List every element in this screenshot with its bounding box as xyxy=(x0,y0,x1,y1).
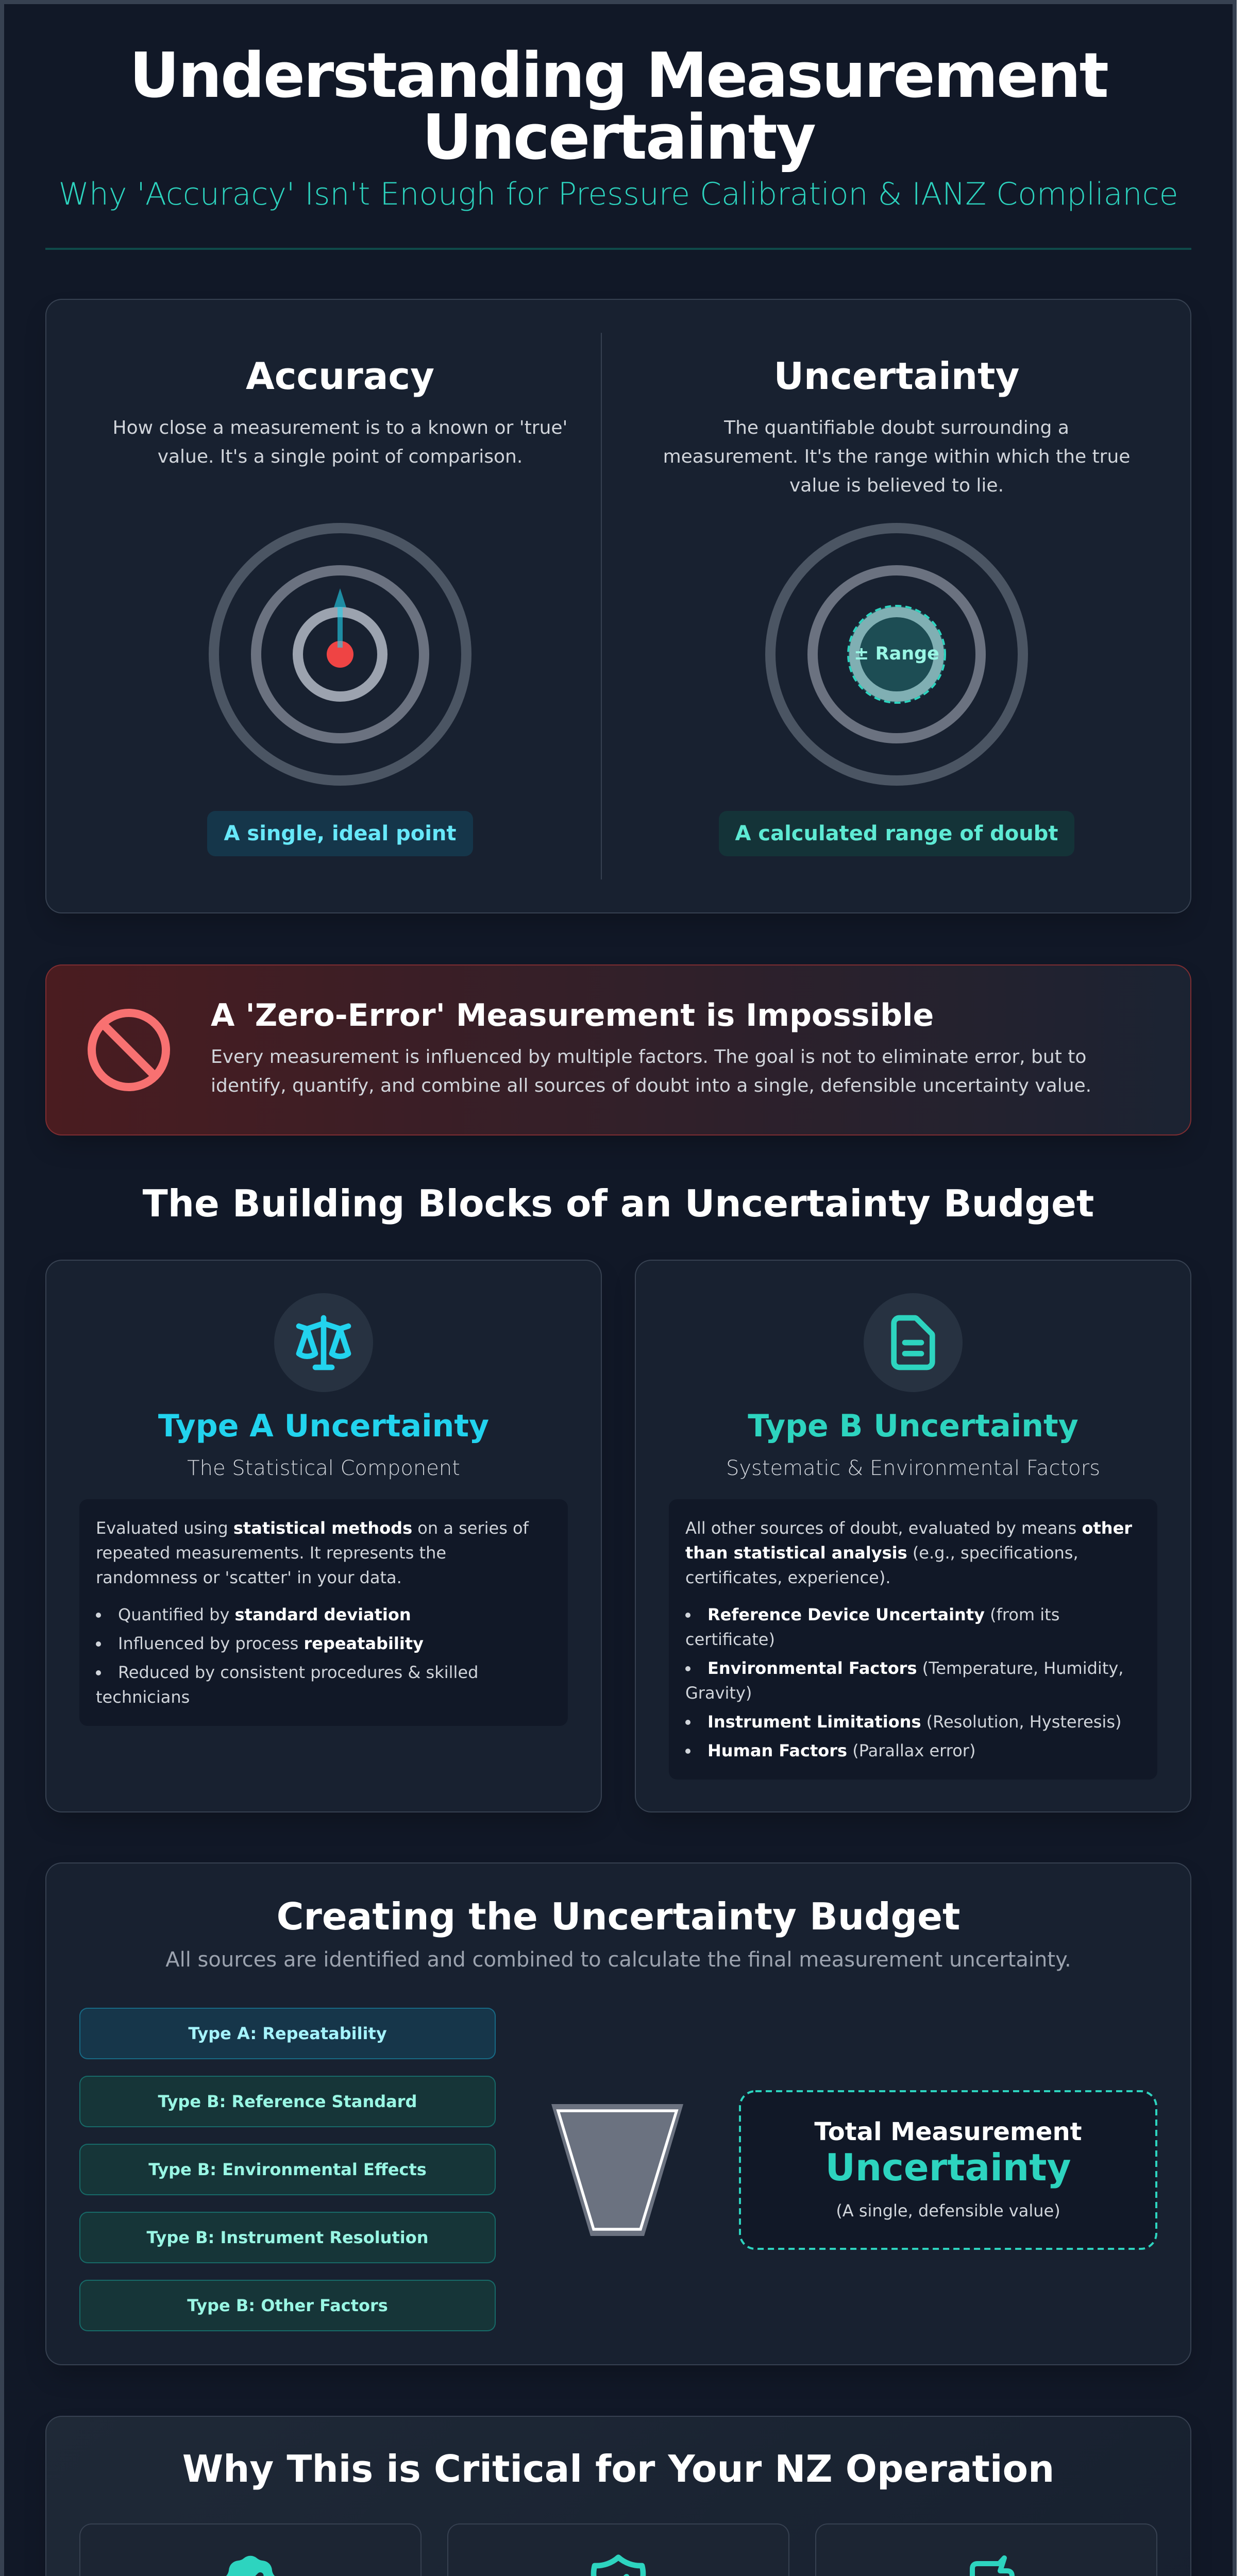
source: environmental effects xyxy=(79,2144,496,2195)
source: environmental effects: Type B: Environmental Effects xyxy=(148,2160,427,2179)
icon: scales xyxy=(274,1293,373,1392)
text: zero-error body: identify, quantify, and combine all sources of doubt into a single, defensible uncertainty value. xyxy=(211,1075,1091,1096)
text: accuracy definition xyxy=(113,417,567,467)
icon: target with single point xyxy=(209,523,471,786)
panel: uncertainty column xyxy=(663,354,1130,856)
text block: type B details: Reference Device Uncertainty (from its certificate) xyxy=(685,1605,1059,1649)
heading: zero-error: A 'Zero-Error' Measurement is Impossible xyxy=(211,997,934,1033)
callout: total measurement uncertainty xyxy=(739,2090,1157,2250)
panel: accuracy column xyxy=(113,354,567,856)
panel: type B xyxy=(635,1260,1191,1812)
icon: target with range xyxy=(765,523,1028,786)
text block: type B details: Environmental Factors (Temperature, Humidity, Gravity) xyxy=(685,1658,1123,1703)
list: uncertainty sources xyxy=(79,2008,496,2331)
text: budget subtitle: All sources are identified and combined to calculate the final measurement uncertainty. xyxy=(165,1948,1071,1972)
label: a calculated range of doubt xyxy=(719,811,1074,856)
icon: funnel xyxy=(551,2104,683,2236)
heading: accuracy: Accuracy xyxy=(246,354,434,398)
text block: type B details: Human Factors (Parallax error) xyxy=(707,1741,975,1760)
text: uncertainty definition: The quantifiable doubt surrounding a xyxy=(724,417,1069,438)
heading: uncertainty: Uncertainty xyxy=(773,354,1020,398)
text block: type A details: Quantified by standard deviation xyxy=(118,1605,411,1624)
subtitle: Why 'Accuracy' Isn't Enough for Pressure Calibration & IANZ Compliance xyxy=(59,176,1178,212)
source: repeatability: Type A: Repeatability xyxy=(188,2024,387,2043)
subheading: type B: Systematic & Environmental Factors xyxy=(726,1456,1100,1480)
subheading: type A: The Statistical Component xyxy=(187,1456,460,1480)
text: zero-error body xyxy=(211,1046,1091,1096)
heading: type B: Type B Uncertainty xyxy=(748,1408,1079,1444)
panel: why this is critical xyxy=(45,2416,1191,2576)
panel: creating the budget xyxy=(45,1862,1191,2365)
icon: shield check xyxy=(591,2554,646,2576)
card: IANZ compliance xyxy=(79,2523,422,2576)
panel: accuracy vs uncertainty xyxy=(45,299,1191,913)
label: uncertainty: Uncertainty xyxy=(825,2146,1071,2189)
heading: creating the budget: Creating the Uncertainty Budget xyxy=(277,1895,960,1938)
text: uncertainty definition: measurement. It's the range within which the true xyxy=(663,446,1130,467)
source: reference standard xyxy=(79,2076,496,2127)
icon: document xyxy=(864,1293,963,1392)
note: defensible value: (A single, defensible value) xyxy=(836,2201,1060,2221)
icon: check badge xyxy=(226,2555,275,2576)
source: other factors xyxy=(79,2280,496,2331)
source: reference standard: Type B: Reference Standard xyxy=(158,2092,417,2111)
title xyxy=(129,40,1108,174)
text block: type A details: Influenced by process repeatability xyxy=(118,1634,424,1653)
panel: zero-error callout xyxy=(45,964,1191,1136)
text block: type B details: Instrument Limitations (Resolution, Hysteresis) xyxy=(707,1712,1121,1732)
heading: type A: Type A Uncertainty xyxy=(158,1408,489,1444)
icon: process integrity glyph xyxy=(970,2555,1015,2576)
text block: type A details: Reduced by consistent procedures & skilled technicians xyxy=(96,1663,478,1707)
heading: why critical: Why This is Critical for Your NZ Operation xyxy=(182,2447,1054,2490)
card: operational safety xyxy=(447,2523,789,2576)
label: a single ideal point: A single, ideal point xyxy=(224,822,457,845)
source: instrument resolution xyxy=(79,2212,496,2263)
icon: prohibition sign xyxy=(88,1009,170,1091)
text: zero-error body: Every measurement is influenced by multiple factors. The goal is not to eliminate error, but to xyxy=(211,1046,1086,1067)
source: instrument resolution: Type B: Instrument Resolution xyxy=(146,2228,428,2247)
title: Uncertainty xyxy=(422,102,815,174)
source: repeatability xyxy=(79,2008,496,2059)
text block: type B details: All other sources of doubt, evaluated by means other than statistical analysis (e.g., specifications, certificates, experience). xyxy=(685,1518,1132,1587)
text block: type B details xyxy=(669,1499,1157,1780)
label: total measurement: Total Measurement xyxy=(814,2117,1082,2146)
text block: type A details xyxy=(79,1499,568,1726)
heading: building blocks: The Building Blocks of an Uncertainty Budget xyxy=(143,1182,1094,1225)
text: accuracy definition: How close a measurement is to a known or 'true' xyxy=(113,417,567,438)
icon: target with range: ± Range xyxy=(854,643,939,664)
text: uncertainty definition xyxy=(663,417,1130,496)
label: a single ideal point xyxy=(207,811,473,856)
text: accuracy definition: value. It's a single point of comparison. xyxy=(158,446,523,467)
card: process integrity xyxy=(815,2523,1157,2576)
label: a calculated range of doubt: A calculated range of doubt xyxy=(735,822,1058,845)
source: other factors: Type B: Other Factors xyxy=(187,2296,388,2315)
text: uncertainty definition: value is believed to lie. xyxy=(789,475,1004,496)
panel: type A xyxy=(45,1260,602,1812)
title: Understanding Measurement xyxy=(129,40,1107,112)
text block: type A details: Evaluated using statistical methods on a series of repeated measurements. It represents the randomness or 'scatter' in your data. xyxy=(96,1518,529,1587)
